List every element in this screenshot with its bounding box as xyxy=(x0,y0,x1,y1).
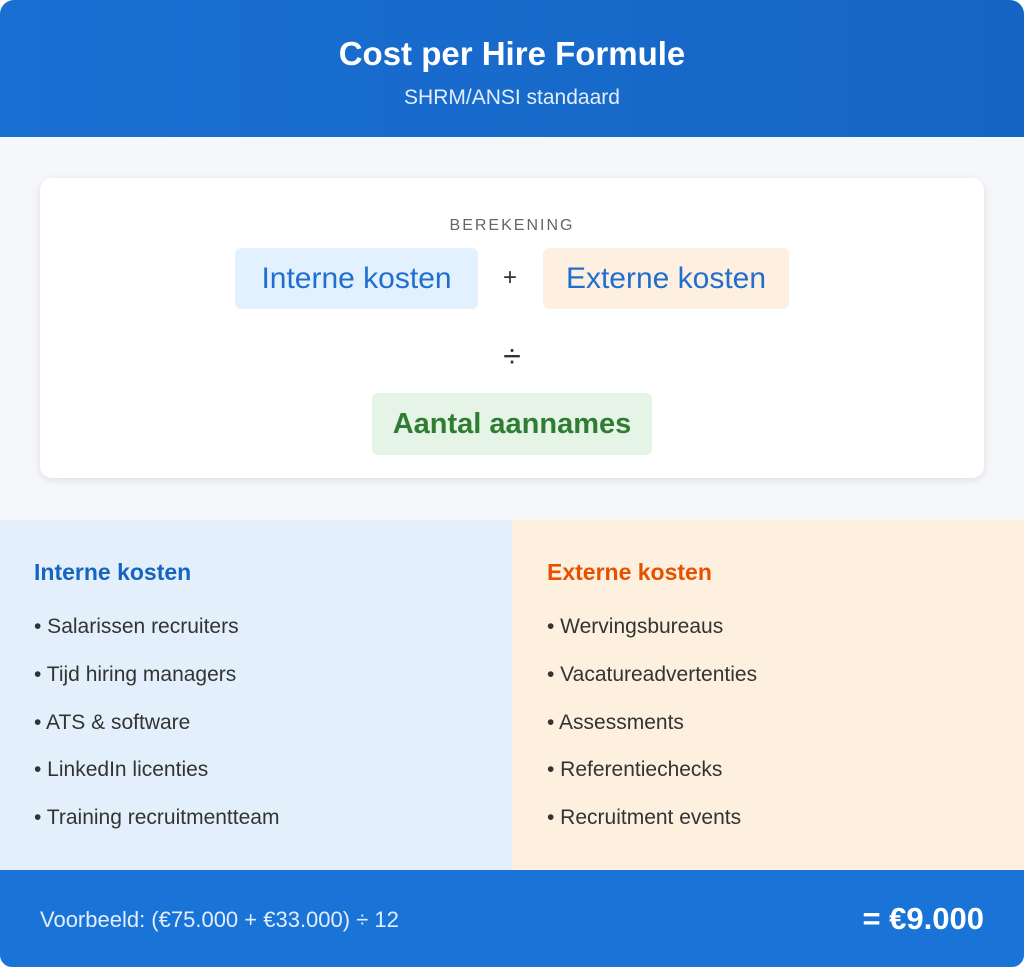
list: • Salarissen recruiters xyxy=(34,615,239,638)
title: Cost per Hire Formule xyxy=(339,35,685,72)
footer: example xyxy=(0,870,1024,967)
plus sign: + xyxy=(503,264,517,291)
result: = €9.000 xyxy=(862,901,984,936)
list: • Tijd hiring managers xyxy=(34,663,236,686)
formula section xyxy=(0,137,1024,520)
list: • Assessments xyxy=(547,711,684,734)
list: • Referentiechecks xyxy=(547,758,722,781)
header xyxy=(0,0,1024,137)
box: aantal aannames: Aantal aannames xyxy=(393,408,631,440)
list xyxy=(34,615,279,829)
list xyxy=(547,615,757,829)
heading: Externe kosten xyxy=(547,559,712,585)
box: externe kosten xyxy=(543,248,789,309)
box: interne kosten: Interne kosten xyxy=(261,262,452,294)
heading: Interne kosten xyxy=(34,559,191,585)
formula card xyxy=(40,178,984,478)
list: • Vacatureadvertenties xyxy=(547,663,757,686)
box: aantal aannames xyxy=(372,393,652,455)
divide sign: ÷ xyxy=(503,338,521,374)
box: externe kosten: Externe kosten xyxy=(566,262,766,294)
label: berekening: BEREKENING xyxy=(450,217,574,234)
list: • Wervingsbureaus xyxy=(547,615,723,638)
list: • LinkedIn licenties xyxy=(34,758,208,781)
list: • Training recruitmentteam xyxy=(34,806,279,829)
panel: externe kosten xyxy=(512,520,1024,870)
panel: interne kosten xyxy=(0,520,512,870)
box: interne kosten xyxy=(235,248,478,309)
list: • ATS & software xyxy=(34,711,190,734)
subtitle: SHRM/ANSI standaard xyxy=(404,86,620,109)
example text: Voorbeeld: (€75.000 + €33.000) ÷ 12 xyxy=(40,907,399,932)
list: • Recruitment events xyxy=(547,806,741,829)
